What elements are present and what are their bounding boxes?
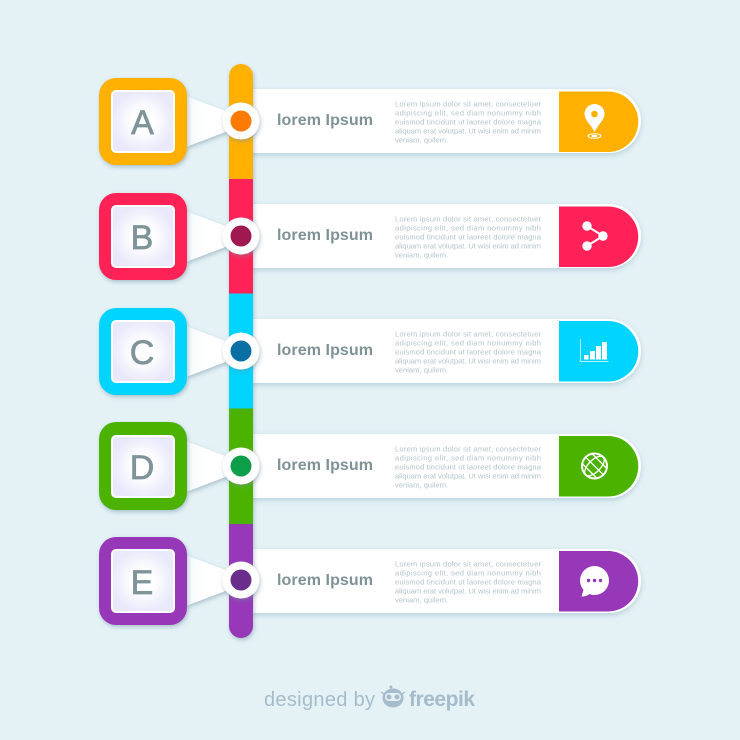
text block B: euismod tincidunt ut laoreet dolore magna [395,232,542,242]
badge B [99,193,187,280]
panel: card D [245,434,641,498]
timeline bar [229,64,253,638]
text block E: euismod tincidunt ut laoreet dolore magna [395,578,542,586]
icon tab E [559,551,638,612]
text block D: Lorem ipsum dolor sit amet, consectetuer [395,444,541,454]
text block B: veniam, quilem. [395,250,448,260]
heading B: lorem Ipsum [277,227,373,244]
node D [222,448,260,484]
icon tab B [559,206,638,267]
card body B [245,204,641,268]
node C [222,332,260,370]
badge E: E [131,564,153,602]
text block B: adipiscing elit, sed diam nonummy nibh [395,224,541,232]
footer credit: freepik [409,688,475,711]
badge E [99,537,187,625]
text block B: aliquam erat volutpat. Ut wisi enim ad minim [395,242,541,250]
text block A [395,100,542,144]
text block D: euismod tincidunt ut laoreet dolore magna [395,462,542,472]
text block D: adipiscing elit, sed diam nonummy nibh [395,454,541,462]
text block D: veniam, quilem. [395,480,448,490]
icon: globe [577,448,612,484]
text block A: veniam, quilem. [395,136,448,144]
text block E [395,560,542,604]
icon: share [582,221,608,251]
text block E: veniam, quilem. [395,596,448,604]
badge A: A [131,104,154,142]
text block C: adipiscing elit, sed diam nonummy nibh [395,338,541,348]
card body A [245,89,641,153]
text block A: euismod tincidunt ut laoreet dolore magna [395,118,542,126]
text block C: Lorem ipsum dolor sit amet, consectetuer [395,330,541,338]
heading C: lorem Ipsum [277,342,373,359]
heading D: lorem Ipsum [277,457,373,474]
node E [222,562,260,598]
panel: card A [245,89,641,153]
node B [222,218,260,254]
heading E: lorem Ipsum [277,572,373,589]
connector B [186,211,228,262]
icon tab A [559,92,638,152]
badge A [99,78,187,165]
text block A: adipiscing elit, sed diam nonummy nibh [395,108,541,118]
panel: card E [245,549,641,613]
text block E: Lorem ipsum dolor sit amet, consectetuer [395,560,541,568]
panel: card B [245,204,641,268]
badge D: D [130,449,154,487]
heading A: lorem Ipsum [277,112,373,129]
footer credit: designed by [264,689,375,711]
icon: bar chart [580,339,608,362]
text block D: aliquam erat volutpat. Ut wisi enim ad minim [395,472,541,480]
icon tab D [559,436,638,496]
footer credit [264,686,475,711]
text block C: aliquam erat volutpat. Ut wisi enim ad minim [395,356,541,366]
icon: chat bubble [580,566,609,596]
connector A [186,96,228,147]
icon tab C [559,321,638,382]
badge B: B [131,219,153,257]
card body E [245,549,641,613]
text block D [395,444,542,490]
node A [222,102,260,140]
text block C: veniam, quilem. [395,366,448,374]
text block A: Lorem ipsum dolor sit amet, consectetuer [395,100,541,108]
badge C [99,308,187,395]
connector D [186,441,228,492]
text block E: aliquam erat volutpat. Ut wisi enim ad minim [395,586,541,596]
badge D [99,422,187,510]
card body C [245,319,641,383]
badge C: C [130,334,154,372]
text block C: euismod tincidunt ut laoreet dolore magna [395,348,542,356]
icon: map pin [584,104,604,138]
text block E: adipiscing elit, sed diam nonummy nibh [395,568,541,578]
text block B: Lorem ipsum dolor sit amet, consectetuer [395,214,541,224]
connector C [186,326,228,377]
connector E [186,555,228,606]
icon: freepik mascot [381,686,405,708]
text block A: aliquam erat volutpat. Ut wisi enim ad minim [395,126,541,136]
text block C [395,330,542,374]
text block B [395,214,542,260]
card body D [245,434,641,498]
panel: card C [245,319,641,383]
